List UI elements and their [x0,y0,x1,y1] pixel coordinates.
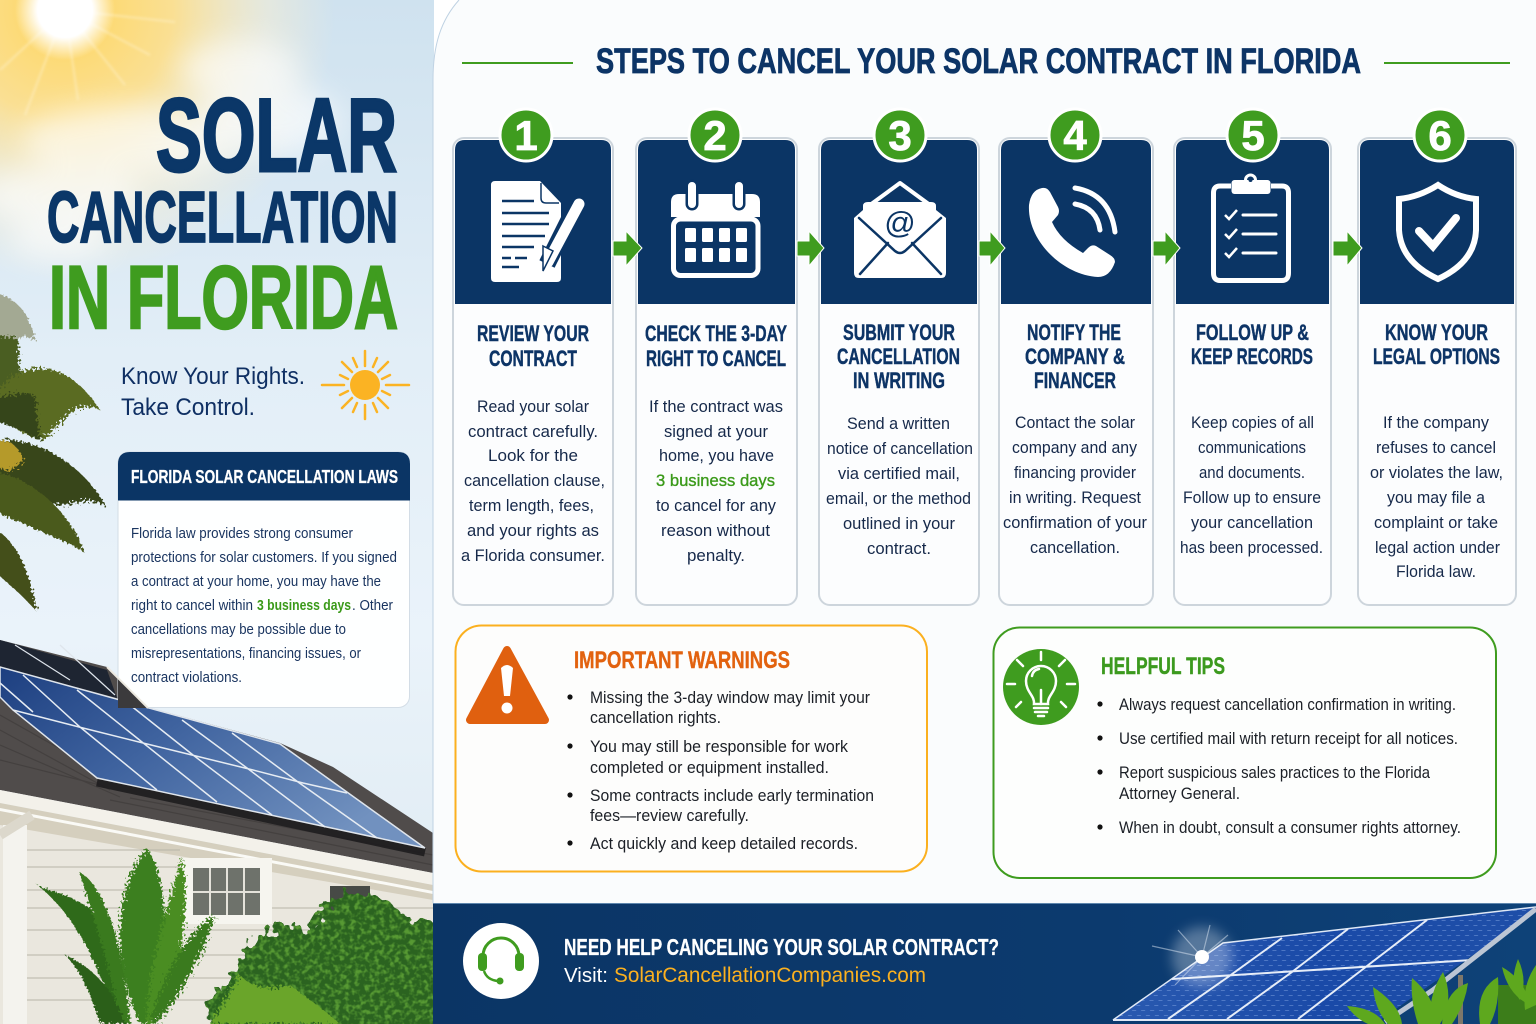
sun glow [0,0,309,244]
step 4 heading: NOTIFY THE [1027,320,1121,345]
step 6 body text: legal action under [1375,538,1500,557]
panel: main content background [433,0,1536,1024]
step 1 body text: cancellation clause, [464,471,605,490]
step 5 card [1174,109,1331,605]
step 4 heading [1025,320,1125,393]
step 6 body text: you may file a [1387,488,1486,507]
warnings list: Act quickly and keep detailed records. [590,835,858,853]
step 4 heading: FINANCER [1034,368,1116,393]
arrow 2 [797,231,824,266]
step 6 body text: If the company [1383,413,1489,432]
warnings list: fees—review carefully. [590,807,749,825]
step 1 body text [461,397,605,565]
icon: phone [1029,188,1115,277]
number badge 4 [1049,109,1101,161]
step 1 body text: term length, fees, [469,496,594,515]
icon: envelope with at sign [854,183,946,278]
laws panel body text: right to cancel within [131,598,253,614]
palm tree [0,293,106,612]
step 3 body text: notice of cancellation [827,439,973,458]
laws panel body text: misrepresentations, financing issues, or [131,646,361,662]
panel: florida solar cancellation laws [118,452,410,708]
arrow 5 [1333,231,1362,266]
tagline: Take Control. [121,394,255,421]
number badge 5 [1227,109,1279,161]
step 5 body text: has been processed. [1180,538,1323,557]
footer banner [433,903,1536,1024]
step 5 body text: and documents. [1199,463,1305,482]
step 5 heading: KEEP RECORDS [1191,344,1313,369]
clouds [0,40,340,260]
arrow 4 [1153,231,1180,266]
warnings list: Some contracts include early termination [590,787,874,805]
laws panel body text: cancellations may be possible due to [131,622,346,638]
step 4 body text: company and any [1012,438,1137,457]
tagline [121,363,305,421]
step 4 body text [1003,413,1147,557]
step 1 heading [477,321,589,371]
step 3 body text [826,414,973,558]
arrow 3 [979,231,1005,266]
number badge 2 [689,109,741,161]
step 2 heading [645,321,787,371]
step 2 heading: RIGHT TO CANCEL [646,346,786,371]
step 2 body text: If the contract was [649,397,783,416]
warnings list: Missing the 3-day window may limit your [590,689,870,707]
tips list: Always request cancellation confirmation in writing. [1119,696,1456,714]
icon: clipboard checklist [1214,175,1288,280]
panel: important warnings [456,626,927,872]
step 1 body text: Look for the [488,446,578,465]
step 2 body text: penalty. [687,546,745,565]
icon: document and pencil [491,181,579,282]
laws panel body text: protections for solar customers. If you signed [131,550,397,566]
roof [0,640,433,873]
step 4 heading: COMPANY & [1025,344,1125,369]
number badge 6 [1414,109,1466,161]
step 6 body text: complaint or take [1374,513,1498,532]
title line: in florida: IN FLORIDA [49,247,398,347]
icon: sun [322,351,409,419]
solar panels on roof [0,667,425,852]
laws panel body text: Florida law provides strong consumer [131,526,353,542]
palm plant [36,848,340,1024]
step 4 body text: Contact the solar [1015,413,1135,432]
footer plants [1347,959,1536,1024]
step 2 body text: to cancel for any [656,496,776,515]
icon: envelope with at sign: @ [884,205,916,240]
laws panel body text: contract violations. [131,670,242,686]
step 2 card [636,109,797,605]
step 4 body text: financing provider [1014,463,1136,482]
step 5 body text: Follow up to ensure [1183,488,1321,507]
wall and siding [0,790,433,1024]
step 6 body text: Florida law. [1396,562,1476,581]
laws panel body text: 3 business days [257,598,351,614]
icon: support headset [463,923,539,999]
step 5 body text [1180,413,1323,557]
title: solar cancellation in florida [47,78,398,347]
step 2 body text: signed at your [664,422,768,441]
tagline: Know Your Rights. [121,363,305,390]
icon: light bulb [1003,649,1079,725]
step 4 body text: in writing. Request [1009,488,1141,507]
number badge 4: 4 [1063,112,1087,159]
step 3 body text: contract. [867,539,931,558]
number badge 1: 1 [514,112,538,159]
footer solar panel [1113,907,1536,1024]
warnings list: You may still be responsible for work [590,738,849,756]
step 4 body text: cancellation. [1030,538,1120,557]
step 6 card [1358,109,1516,605]
tips list: Attorney General. [1119,785,1240,803]
footer call to action text: NEED HELP CANCELING YOUR SOLAR CONTRACT? [564,934,999,960]
step 1 card [453,109,613,605]
step 2 body text: 3 business days [656,471,775,490]
panel: sky and house photo background [0,0,460,1024]
step 6 heading [1373,320,1500,369]
title line: solar: SOLAR [156,78,397,194]
step 3 heading: IN WRITING [853,368,945,393]
number badge 1 [500,109,552,161]
arrow 1 [613,231,642,266]
step 1 body text: a Florida consumer. [461,546,605,565]
step 3 heading: SUBMIT YOUR [843,320,955,345]
footer sun flare [1152,925,1232,987]
tips list: Report suspicious sales practices to the Florida [1119,764,1431,782]
step 3 body text: Send a written [847,414,950,433]
number badge 3 [874,109,926,161]
laws panel body text: a contract at your home, you may have the [131,574,381,590]
step 5 body text: Keep copies of all [1191,413,1314,432]
tips list: Use certified mail with return receipt for all notices. [1119,730,1458,748]
step 5 body text: communications [1198,438,1306,457]
step 1 heading: CONTRACT [489,346,577,371]
laws panel body text [131,526,397,686]
step 6 body text: refuses to cancel [1376,438,1496,457]
laws panel heading: FLORIDA SOLAR CANCELLATION LAWS [131,466,398,487]
footer call to action text [564,934,999,987]
step 1 body text: Read your solar [477,397,589,416]
icon: calendar [671,186,760,276]
tips heading: HELPFUL TIPS [1101,653,1225,680]
tips list: When in doubt, consult a consumer rights attorney. [1119,819,1461,837]
step 1 body text: and your rights as [467,521,599,540]
panel: helpful tips [994,628,1496,878]
warnings list [567,689,874,853]
step 6 body text: or violates the law, [1370,463,1503,482]
step 4 body text: confirmation of your [1003,513,1147,532]
footer call to action text: SolarCancellationCompanies.com [614,964,926,987]
step 5 heading: FOLLOW UP & [1196,320,1309,345]
step 6 body text [1370,413,1503,581]
warnings list: completed or equipment installed. [590,759,829,777]
shrubs [208,893,460,1024]
laws panel header [118,452,410,500]
number badge 6: 6 [1428,112,1452,159]
title line: cancellation: CANCELLATION [47,177,398,258]
step 3 body text: outlined in your [843,514,955,533]
step 1 body text: contract carefully. [468,422,598,441]
step 5 body text: your cancellation [1191,513,1313,532]
laws panel body text: . Other [352,598,393,614]
step 3 body text: email, or the method [826,489,971,508]
warnings heading: IMPORTANT WARNINGS [574,647,790,674]
step 3 heading [837,320,960,393]
number badge 2: 2 [703,112,727,159]
step 3 body text: via certified mail, [838,464,960,483]
step 1 heading: REVIEW YOUR [477,321,589,346]
icon: warning triangle [470,650,545,720]
upper dark solar panels [0,640,117,698]
step 3 card [819,109,979,605]
step 2 heading: CHECK THE 3-DAY [645,321,787,346]
window [182,858,370,931]
tips list [1097,696,1461,837]
step 5 heading [1191,320,1313,369]
warnings list: cancellation rights. [590,709,721,727]
step 2 body text: home, you have [659,446,774,465]
step 2 body text: reason without [661,521,770,540]
number badge 3: 3 [888,112,912,159]
step 2 body text [649,397,783,565]
footer call to action text: Visit: [564,965,608,987]
number badge 5: 5 [1241,112,1265,159]
step 4 card [999,109,1153,605]
icon: shield with check [1399,185,1476,279]
step 3 heading: CANCELLATION [837,344,960,369]
step 6 heading: KNOW YOUR [1385,320,1488,345]
